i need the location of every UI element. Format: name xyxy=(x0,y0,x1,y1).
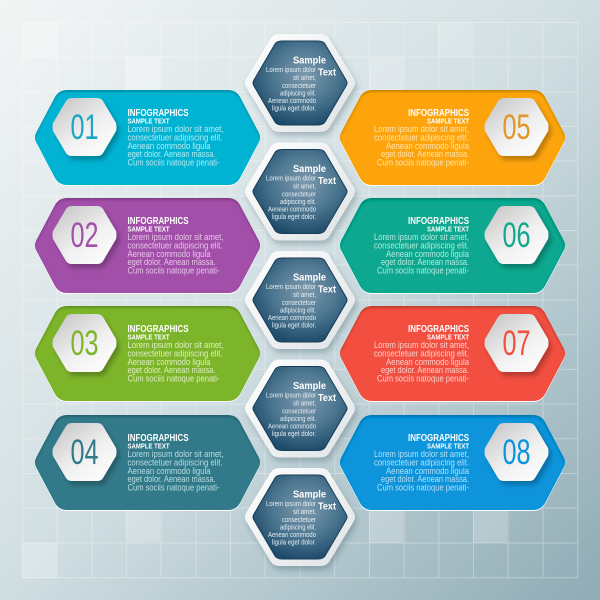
center text 5: consectetuer xyxy=(282,517,317,524)
icon: hexagon 01: 01 xyxy=(70,108,98,147)
center text 1: Sample xyxy=(293,56,326,66)
text block 04: eget dolor. Aenean massa. xyxy=(128,474,216,484)
panel: 02 xyxy=(35,198,260,294)
center text 4: consectetuer xyxy=(282,408,317,416)
text block 08: consectetuer adipiscing elit. xyxy=(374,457,469,467)
text block 01: Aenean commodo ligula xyxy=(128,141,210,151)
center text 3: Aenean commodo xyxy=(268,315,316,322)
icon: hexagon 06 xyxy=(484,206,548,264)
text block 02: Aenean commodo ligula xyxy=(128,249,210,259)
panel: 04 xyxy=(35,415,260,511)
center text 2: adipiscing elit. xyxy=(280,199,316,206)
text block 07: consectetuer adipiscing elit. xyxy=(374,348,469,358)
text block 05: Aenean commodo ligula xyxy=(386,141,469,151)
center text 4: sit amet, xyxy=(293,400,316,408)
center text 3: consectetuer xyxy=(282,300,317,307)
center text 4: Sample xyxy=(293,381,326,392)
text block 05: SAMPLE TEXT xyxy=(427,118,470,126)
icon: hexagon 03: 03 xyxy=(70,324,98,363)
center text 4: Text xyxy=(318,393,337,404)
center text 4: Lorem ipsum dolor xyxy=(266,392,317,400)
center text 5: Aenean commodo xyxy=(268,532,316,539)
text block 01: INFOGRAPHICS xyxy=(128,108,189,119)
center hexagon 3 xyxy=(245,251,355,349)
panel: 06 xyxy=(340,198,565,294)
text block 08: INFOGRAPHICS xyxy=(408,433,469,444)
text block 07: Lorem ipsum dolor sit amet, xyxy=(374,340,469,350)
icon: hexagon 08: 08 xyxy=(502,433,530,472)
icon: hexagon 07 xyxy=(484,314,548,372)
center text 5: sit amet, xyxy=(293,509,316,516)
icon: hexagon 08 xyxy=(484,423,548,481)
text block 05: Lorem ipsum dolor sit amet, xyxy=(374,124,469,134)
text block 02: consectetuer adipiscing elit. xyxy=(128,240,222,250)
center text 1: ligula eget dolor. xyxy=(272,106,316,112)
center text 5: Sample xyxy=(293,490,326,500)
text block 02 xyxy=(128,216,224,276)
center text 1: adipiscing elit. xyxy=(280,90,316,98)
text block 07: Aenean commodo ligula xyxy=(386,357,469,367)
center text 3: ligula eget dolor. xyxy=(272,322,316,330)
text block 04: Cum sociis natoque penati- xyxy=(128,483,220,493)
text block 03: INFOGRAPHICS xyxy=(128,324,189,335)
text block 07: Cum sociis natoque penati- xyxy=(377,374,469,384)
text block 04: Lorem ipsum dolor sit amet, xyxy=(128,449,224,459)
text block 04: consectetuer adipiscing elit. xyxy=(128,457,222,467)
center text 2: Aenean commodo xyxy=(268,206,316,214)
panel: 08 xyxy=(340,415,565,511)
center hexagon 4 xyxy=(245,360,355,458)
center text 1 xyxy=(266,56,337,112)
center text 3: sit amet, xyxy=(293,292,316,299)
text block 03: Cum sociis natoque penati- xyxy=(128,374,220,384)
text block 06: INFOGRAPHICS xyxy=(408,216,469,227)
text block 01: SAMPLE TEXT xyxy=(128,118,170,126)
center text 1: Lorem ipsum dolor xyxy=(266,67,317,74)
text block 08: SAMPLE TEXT xyxy=(427,444,470,450)
icon: hexagon 06: 06 xyxy=(502,216,530,255)
icon: hexagon 07: 07 xyxy=(502,324,530,363)
text block 08: Aenean commodo ligula xyxy=(386,466,469,476)
text block 03: eget dolor. Aenean massa. xyxy=(128,365,216,375)
center text 1: Text xyxy=(318,68,337,78)
text block 05 xyxy=(374,108,470,168)
center text 2: Lorem ipsum dolor xyxy=(266,176,317,182)
text block 08 xyxy=(374,433,470,493)
center text 3: Text xyxy=(318,284,337,296)
text block 02: SAMPLE TEXT xyxy=(128,226,170,234)
text block 05: INFOGRAPHICS xyxy=(408,108,469,119)
text block 02: Lorem ipsum dolor sit amet, xyxy=(128,232,224,242)
center text 2: consectetuer xyxy=(282,192,317,198)
text block 07 xyxy=(374,324,470,384)
center text 3 xyxy=(266,272,337,330)
center text 4 xyxy=(266,381,337,438)
text block 06: Aenean commodo ligula xyxy=(386,249,469,259)
center text 4: adipiscing elit. xyxy=(280,416,316,423)
text block 07: SAMPLE TEXT xyxy=(427,334,470,342)
text block 03: consectetuer adipiscing elit. xyxy=(128,348,222,358)
text block 04: Aenean commodo ligula xyxy=(128,466,210,476)
icon: hexagon 02 xyxy=(52,206,116,264)
text block 07: eget dolor. Aenean massa. xyxy=(381,365,469,375)
icon: hexagon 01 xyxy=(52,98,116,156)
text block 06: SAMPLE TEXT xyxy=(427,226,470,234)
center text 3: Lorem ipsum dolor xyxy=(266,284,317,291)
text block 01: Cum sociis natoque penati- xyxy=(128,158,220,168)
text block 03: Aenean commodo ligula xyxy=(128,357,210,367)
center text 5: ligula eget dolor. xyxy=(272,540,316,546)
text block 01: Lorem ipsum dolor sit amet, xyxy=(128,124,224,134)
text block 02: eget dolor. Aenean massa. xyxy=(128,257,216,267)
icon: hexagon 05 xyxy=(484,98,548,156)
panel: 07 xyxy=(340,306,565,402)
text block 06: Cum sociis natoque penati- xyxy=(377,266,469,276)
center text 1: Aenean commodo xyxy=(268,98,316,105)
text block 04: SAMPLE TEXT xyxy=(128,444,170,450)
icon: hexagon 04 xyxy=(52,423,116,481)
text block 08: Lorem ipsum dolor sit amet, xyxy=(374,449,469,459)
panel: 05 xyxy=(340,90,565,186)
center text 3: Sample xyxy=(293,272,326,284)
center text 4: ligula eget dolor. xyxy=(272,431,316,438)
text block 01: eget dolor. Aenean massa. xyxy=(128,149,216,159)
text block 06: consectetuer adipiscing elit. xyxy=(374,240,469,250)
center text 2: Sample xyxy=(293,164,326,175)
text block 06: Lorem ipsum dolor sit amet, xyxy=(374,232,469,242)
center text 5: adipiscing elit. xyxy=(280,524,316,532)
text block 03: Lorem ipsum dolor sit amet, xyxy=(128,340,224,350)
text block 08: Cum sociis natoque penati- xyxy=(377,483,469,493)
icon: hexagon 05: 05 xyxy=(502,108,530,147)
center text 2: ligula eget dolor. xyxy=(272,214,316,221)
panel: 01 xyxy=(35,90,260,186)
text block 05: consectetuer adipiscing elit. xyxy=(374,132,469,142)
text block 04 xyxy=(128,433,224,493)
text block 06 xyxy=(374,216,470,276)
text block 01 xyxy=(128,108,224,168)
text block 03: SAMPLE TEXT xyxy=(128,334,170,342)
panel: 03 xyxy=(35,306,260,402)
center text 5 xyxy=(266,490,337,546)
text block 03 xyxy=(128,324,224,384)
icon: hexagon 02: 02 xyxy=(70,216,98,255)
text block 06: eget dolor. Aenean massa. xyxy=(381,257,469,267)
center text 2: sit amet, xyxy=(293,184,316,190)
center text 2: Text xyxy=(318,176,337,187)
text block 07: INFOGRAPHICS xyxy=(408,324,469,335)
text block 01: consectetuer adipiscing elit. xyxy=(128,132,222,142)
center hexagon 5 xyxy=(245,468,355,566)
text block 02: INFOGRAPHICS xyxy=(128,216,189,227)
center text 5: Text xyxy=(318,502,337,512)
center text 1: sit amet, xyxy=(293,75,316,82)
icon: hexagon 04: 04 xyxy=(70,433,98,472)
center text 4: Aenean commodo xyxy=(268,424,316,430)
center text 3: adipiscing elit. xyxy=(280,308,316,314)
icon: hexagon 03 xyxy=(52,314,116,372)
center text 1: consectetuer xyxy=(282,83,317,90)
center hexagon 2 xyxy=(245,142,355,240)
center text 2 xyxy=(266,164,337,221)
text block 04: INFOGRAPHICS xyxy=(128,433,189,444)
text block 05: Cum sociis natoque penati- xyxy=(377,158,469,168)
text block 02: Cum sociis natoque penati- xyxy=(128,266,220,276)
center hexagon 1 xyxy=(245,34,355,132)
center text 5: Lorem ipsum dolor xyxy=(266,501,317,508)
text block 05: eget dolor. Aenean massa. xyxy=(381,149,469,159)
text block 08: eget dolor. Aenean massa. xyxy=(381,474,469,484)
